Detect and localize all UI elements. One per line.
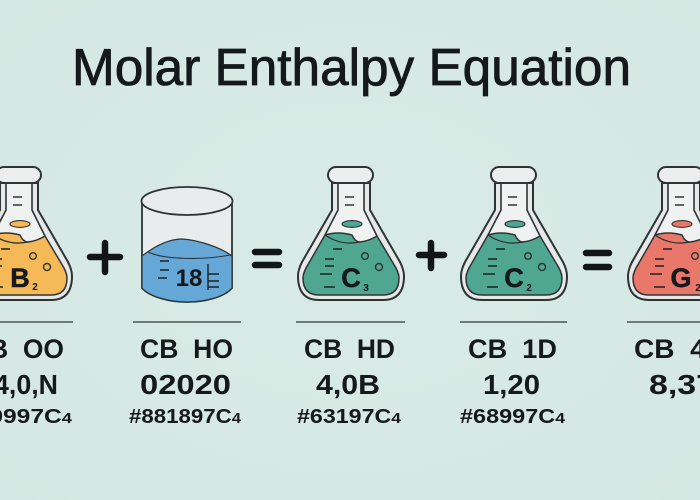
column 2 values [129,322,242,428]
column 3 values [296,322,405,428]
icon: green flask C3: 3 [363,283,369,294]
column 5 values [627,322,700,400]
column 4 values: CB 1D [468,334,557,364]
icon: red flask G2: G [670,263,692,293]
title: Molar Enthalpy Equation [72,39,631,97]
icon: blue beaker 18 [142,187,232,302]
column 4 values [460,322,567,428]
plus sign [90,243,120,272]
icon: orange flask B2: 2 [32,282,38,293]
column 3 values: 4,0B [316,369,380,400]
column 1 values [0,322,73,428]
icon: orange flask B2: B [10,263,30,293]
icon: green flask C3: C [341,263,361,293]
icon: green flask C2: 2 [526,283,532,294]
equals sign [586,253,609,267]
column 4 values: 1,20 [483,369,540,400]
icon: green flask C3 [298,167,404,300]
equals sign [255,252,279,265]
column 2 values: #881897C 4 [129,406,242,428]
icon: orange flask B2 [0,167,72,300]
icon: green flask C2 [461,167,567,300]
icon: blue beaker 18: 18 [176,265,202,292]
column 2 values: 02020 [140,369,231,400]
icon: green flask C2: C [504,263,524,293]
column 3 values: #63197C 4 [297,406,402,428]
icon: red flask G2 [628,167,700,300]
column 3 values: CB HD [304,334,395,364]
column 4 values: #68997C 4 [460,406,566,428]
plus sign [419,243,444,268]
column 2 values: CB HO [140,334,233,364]
